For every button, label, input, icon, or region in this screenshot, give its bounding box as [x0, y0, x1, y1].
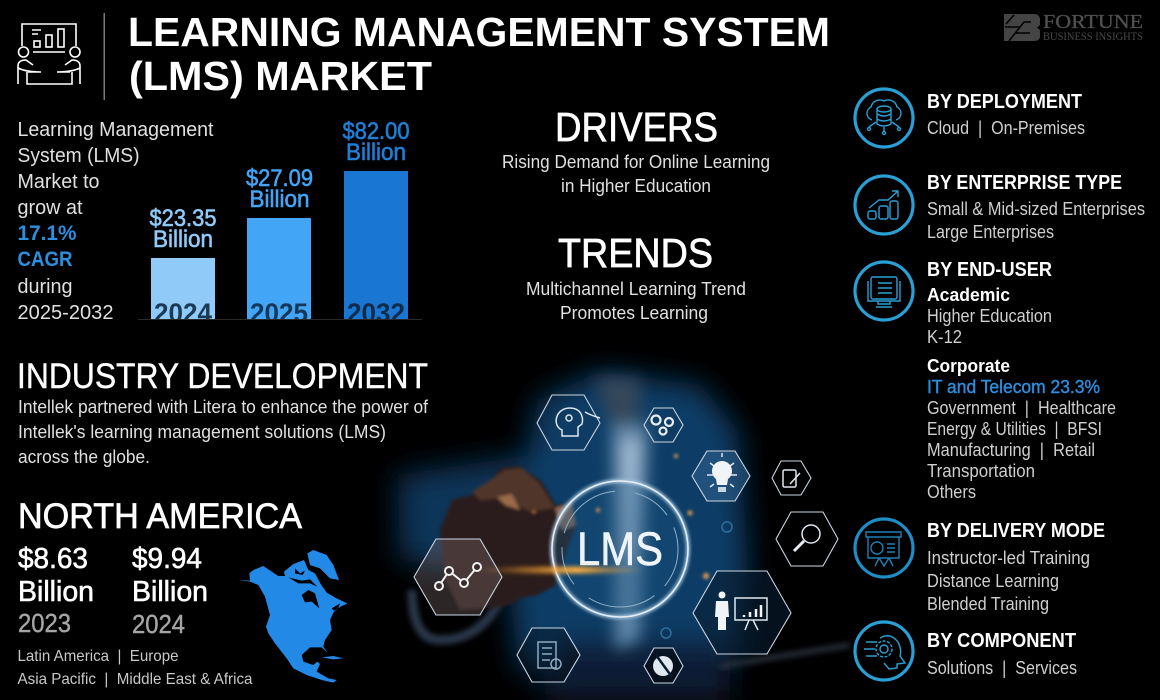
hexagon: checklist — [517, 628, 580, 682]
market growth text: Market to — [18, 171, 100, 193]
bar labels: 2025 — [250, 298, 308, 328]
bar labels: 2032 — [347, 298, 405, 328]
icon: presentation board — [855, 519, 913, 577]
hexagon: line chart — [414, 539, 502, 615]
value 2024: Billion — [132, 576, 208, 608]
icon: head with gear — [855, 622, 913, 680]
segment: by end-user: Transportation — [927, 461, 1035, 481]
value 2024: Billion — [153, 226, 213, 253]
bar 2024 — [151, 258, 215, 319]
segment: by end-user: BY END-USER — [927, 259, 1053, 281]
divider — [104, 13, 105, 100]
segment: by deployment: BY DEPLOYMENT — [927, 91, 1082, 113]
logo: Fortune Business Insights: FORTUNE — [1043, 12, 1143, 33]
segment: by delivery mode: Blended Training — [927, 594, 1049, 614]
value 2023 — [18, 543, 94, 638]
north america — [18, 497, 303, 688]
hexagon: magnifier — [776, 512, 838, 566]
drivers: in Higher Education — [561, 176, 711, 196]
segment: by end-user: K-12 — [927, 327, 962, 347]
region heading: NORTH AMERICA — [18, 497, 303, 536]
market growth text: during — [18, 276, 72, 298]
industry development: Intellek's learning management solutions (LMS) — [18, 422, 386, 442]
hand — [440, 466, 576, 610]
suit — [398, 372, 748, 700]
hexagon: light bulb — [692, 451, 750, 501]
targets — [661, 522, 732, 638]
segment: by end-user: Corporate — [927, 356, 1010, 376]
value 2032: $82.00 — [342, 118, 410, 145]
icon: cloud database — [855, 89, 913, 147]
logo: Fortune Business Insights — [1004, 12, 1143, 43]
segment: by end-user: Manufacturing | Retail — [927, 440, 1095, 460]
title — [128, 9, 830, 99]
segment: by end-user: Academic — [927, 285, 1010, 305]
segment: by enterprise type: BY ENTERPRISE TYPE — [927, 172, 1122, 194]
bar labels — [155, 303, 404, 319]
value 2023: Billion — [18, 576, 94, 608]
segment: by delivery mode: BY DELIVERY MODE — [927, 520, 1105, 542]
interface circle — [552, 481, 688, 617]
market growth text — [18, 119, 214, 324]
photo: businessman touching LMS interface — [398, 372, 850, 700]
interface circle: LMS — [577, 522, 663, 575]
axis line — [138, 319, 422, 320]
market growth text: Learning Management — [18, 119, 214, 141]
market growth text: 2025-2032 — [18, 302, 114, 324]
bar labels: 2024 — [154, 298, 212, 328]
market growth text: grow at — [18, 197, 83, 219]
trends — [526, 230, 746, 323]
value 2023: 2023 — [18, 608, 71, 638]
glow dots — [532, 454, 709, 579]
value 2024: 2024 — [132, 609, 185, 639]
value 2025: Billion — [250, 186, 310, 213]
icon: growth coins — [855, 176, 913, 234]
title: LEARNING MANAGEMENT SYSTEM — [128, 9, 830, 55]
segment: by deployment — [855, 89, 1085, 147]
market growth text: CAGR — [18, 248, 72, 271]
bar chart — [138, 118, 422, 328]
trends: Multichannel Learning Trend — [526, 279, 746, 299]
segment: by enterprise type: Large Enterprises — [927, 222, 1054, 242]
industry development — [17, 357, 429, 467]
trends: Promotes Learning — [560, 303, 708, 323]
bar 2032 — [344, 171, 408, 319]
value 2032 — [342, 118, 410, 166]
value 2024 — [150, 205, 216, 253]
industry development: Intellek partnered with Litera to enhance the power of — [18, 397, 429, 417]
market growth text: System (LMS) — [18, 145, 140, 167]
industry development: across the globe. — [18, 447, 150, 467]
icon: computer with list — [855, 262, 913, 320]
value 2025: $27.09 — [246, 165, 313, 192]
value 2025 — [246, 165, 313, 213]
segment: by enterprise type: Small & Mid-sized Enterprises — [927, 199, 1145, 219]
segment: by end-user: Government | Healthcare — [927, 398, 1116, 418]
value 2032: Billion — [346, 139, 406, 166]
other regions: Asia Pacific | Middle East & Africa — [18, 671, 253, 688]
value 2024: $23.35 — [150, 205, 216, 232]
value 2024: $9.94 — [132, 543, 202, 575]
hexagon: tablet — [772, 461, 811, 495]
value 2024 — [132, 543, 208, 639]
segment: by enterprise type — [855, 172, 1145, 242]
light streak — [475, 566, 645, 574]
segment: by end-user — [855, 259, 1116, 502]
hexagon: gears — [644, 408, 683, 442]
market growth text: 17.1% — [18, 222, 77, 245]
segment: by end-user: Others — [927, 482, 976, 502]
title: (LMS) MARKET — [129, 53, 432, 99]
segment: by delivery mode: Instructor-led Training — [927, 548, 1090, 568]
icon: meeting around a screen — [18, 24, 80, 84]
drivers: Rising Demand for Online Learning — [502, 152, 770, 172]
logo: Fortune Business Insights: BUSINESS INSIGHTS — [1043, 31, 1143, 43]
bar 2025 — [247, 218, 311, 319]
segment: by end-user: Energy & Utilities | BFSI — [927, 419, 1102, 439]
other regions — [18, 648, 253, 688]
hudson bay and arctic gaps — [288, 568, 340, 611]
sleeve cuff — [412, 590, 500, 640]
tie and shirt — [595, 378, 648, 650]
segment: by component — [855, 622, 1077, 680]
segment: by delivery mode — [855, 519, 1105, 614]
trends: TRENDS — [558, 230, 713, 276]
other regions: Latin America | Europe — [18, 648, 179, 665]
segment: by end-user: Higher Education — [927, 306, 1052, 326]
hexagon: brain — [537, 395, 600, 450]
hexagon: presenter with chart — [693, 571, 791, 654]
drivers: DRIVERS — [555, 104, 718, 150]
desk edge — [720, 645, 850, 666]
segment: by component: BY COMPONENT — [927, 630, 1076, 652]
map: north america — [238, 550, 347, 683]
segment: by delivery mode: Distance Learning — [927, 571, 1059, 591]
value 2023: $8.63 — [18, 543, 88, 575]
hexagon: pie chart — [644, 648, 683, 683]
drivers — [502, 104, 770, 196]
segment: by component: Solutions | Services — [927, 658, 1077, 678]
industry development: INDUSTRY DEVELOPMENT — [17, 357, 428, 396]
segment: by end-user: IT and Telecom 23.3% — [927, 377, 1100, 397]
segment: by deployment: Cloud | On-Premises — [927, 118, 1085, 138]
